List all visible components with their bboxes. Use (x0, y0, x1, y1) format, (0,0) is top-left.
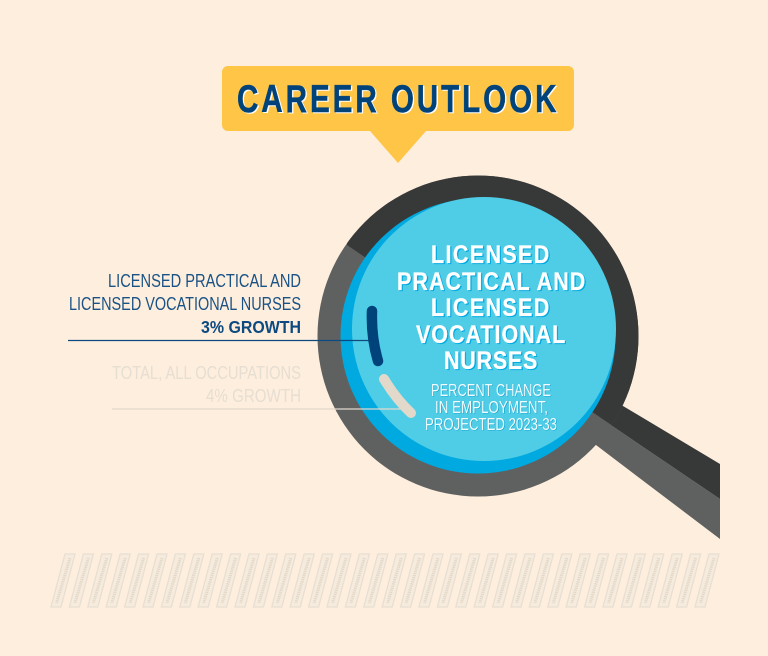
magnifying glass (318, 176, 720, 539)
lens heading: VOCATIONAL (417, 321, 566, 349)
title: CAREER OUTLOOK (238, 79, 558, 122)
lens subheading: PROJECTED 2023-33 (426, 415, 558, 435)
decorative stripe band (51, 554, 719, 607)
lens (340, 197, 616, 474)
label: total occupations 4% growth: TOTAL, ALL OCCUPATIONS (112, 362, 301, 383)
arc: 3% growth (372, 311, 378, 361)
leader line: total occupations (112, 408, 402, 410)
lens subheading (425, 380, 558, 435)
label: licensed nurses 3% growth: 3% GROWTH (201, 317, 301, 337)
handle (570, 390, 720, 539)
leader line: licensed nurses (68, 340, 372, 342)
lens subheading: PERCENT CHANGE (431, 380, 551, 400)
lens heading (397, 240, 587, 375)
lens subheading: IN EMPLOYMENT, (436, 398, 549, 418)
lens heading: NURSES (445, 347, 539, 375)
label: total occupations 4% growth: 4% GROWTH (206, 385, 301, 406)
lens heading: LICENSED (432, 294, 550, 322)
label: licensed nurses 3% growth: LICENSED PRACTICAL AND (108, 270, 301, 291)
lens heading: PRACTICAL AND (397, 267, 585, 295)
callout bubble (222, 66, 574, 163)
lens heading: LICENSED (432, 241, 550, 269)
lens heading: VOCATIONAL (416, 320, 565, 348)
lens heading: NURSES (444, 346, 537, 374)
title: CAREER OUTLOOK (237, 78, 557, 121)
lens subheading: IN EMPLOYMENT, (435, 397, 548, 417)
lens heading: LICENSED (431, 293, 549, 321)
lens subheading: PROJECTED 2023-33 (425, 414, 557, 434)
label: licensed nurses 3% growth: LICENSED VOCATIONAL NURSES (69, 293, 301, 314)
label: licensed nurses 3% growth (69, 270, 301, 337)
arc: 4% growth (384, 379, 411, 413)
lens heading: PRACTICAL AND (398, 268, 587, 296)
label: total occupations 4% growth (112, 362, 301, 406)
title callout (222, 66, 574, 163)
lens subheading: PERCENT CHANGE (432, 381, 552, 401)
lens frame (318, 176, 638, 496)
infographic canvas (50, 66, 720, 608)
lens heading: LICENSED (431, 240, 549, 268)
